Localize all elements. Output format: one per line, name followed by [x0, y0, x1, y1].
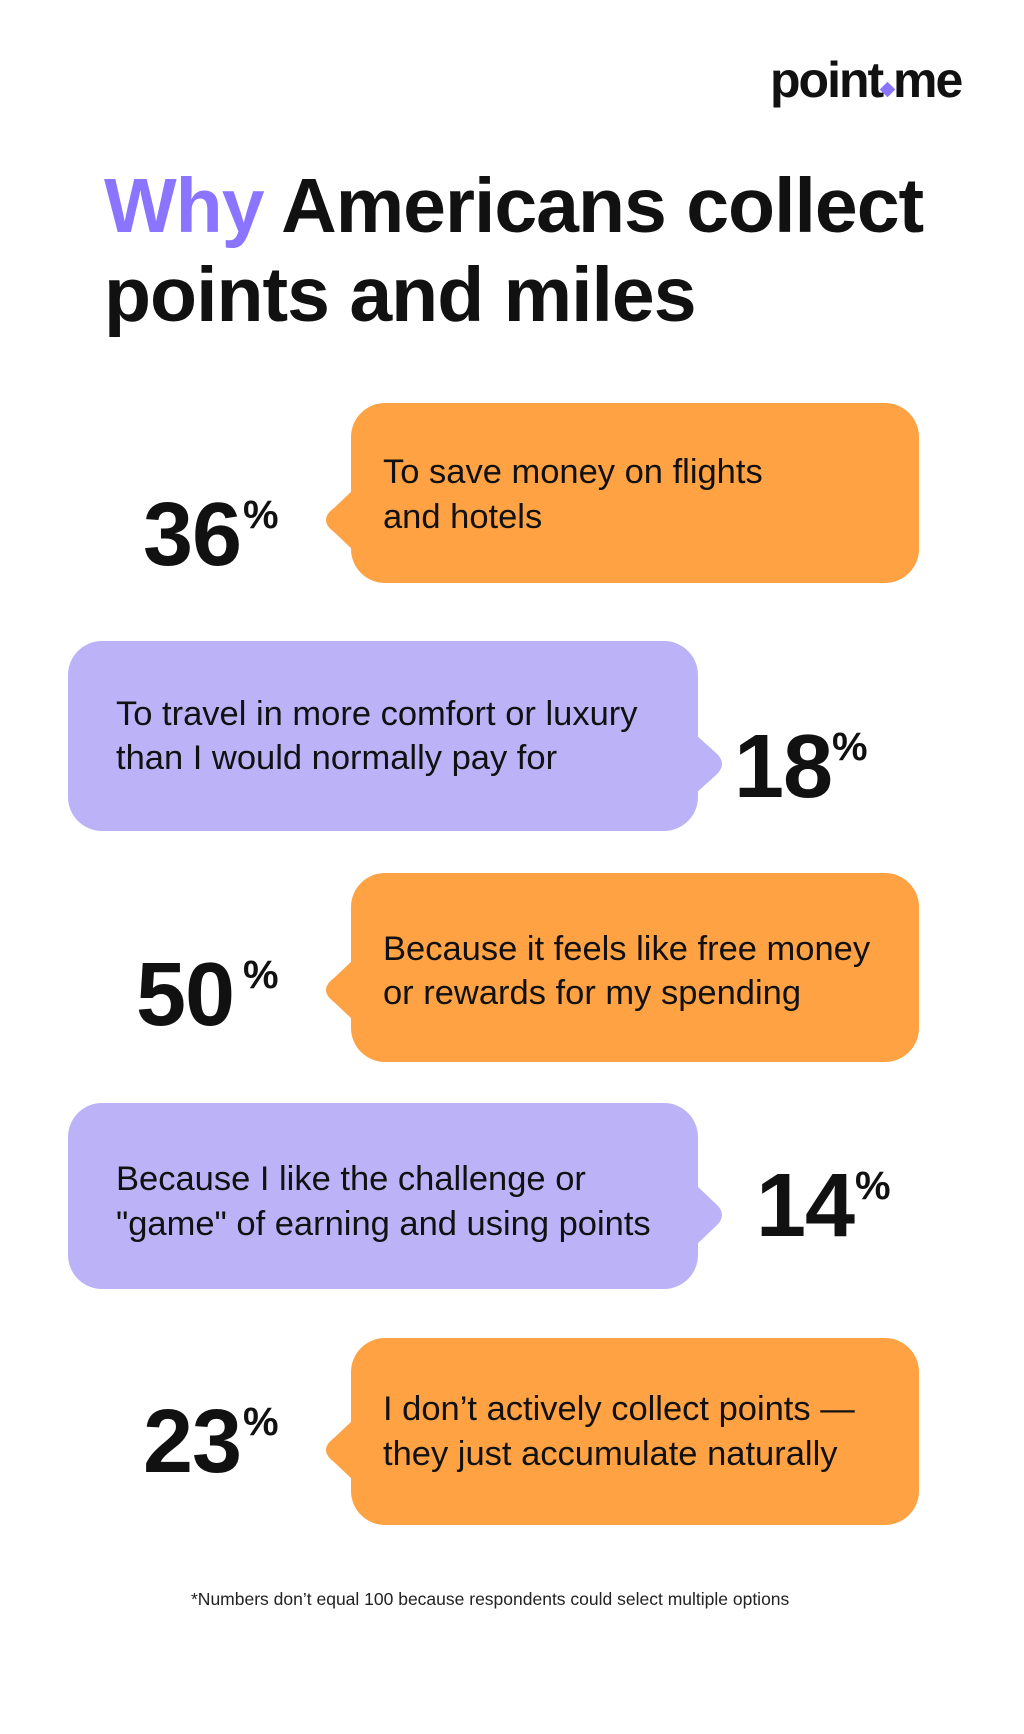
item 1: 36% — [143, 403, 919, 585]
text 5: I don’t actively collect points — — [383, 1390, 855, 1428]
title — [104, 163, 924, 338]
item 2: 18% — [68, 641, 868, 831]
bubble 1 — [326, 403, 919, 583]
text 1: To save money on flights — [383, 453, 763, 491]
logo: me — [893, 52, 962, 108]
footnote: *Numbers don’t equal 100 because respondents could select multiple options — [191, 1589, 790, 1609]
text 2: than I would normally pay for — [116, 739, 557, 777]
stat 50%: % — [243, 953, 279, 997]
logo — [770, 52, 962, 108]
stat 14%: 14 — [756, 1156, 855, 1256]
bubble 4 — [68, 1103, 722, 1289]
title: points and miles — [104, 252, 696, 338]
stat 50% — [136, 945, 279, 1045]
logo: point — [770, 52, 885, 108]
text 4: "game" of earning and using points — [116, 1205, 651, 1243]
text 5: they just accumulate naturally — [383, 1435, 838, 1473]
text 1: and hotels — [383, 498, 542, 536]
stat 18%: % — [832, 725, 868, 769]
text 3: or rewards for my spending — [383, 974, 801, 1012]
item 4: 14% — [68, 1103, 891, 1289]
title: Why Americans collect — [104, 163, 924, 249]
bubble 3 — [326, 873, 919, 1062]
stat 36%: % — [243, 493, 279, 537]
stat 50%: 50 — [136, 945, 234, 1045]
item 5: 23% — [143, 1338, 919, 1525]
stat 23%: % — [243, 1400, 279, 1444]
item 3: 50% — [136, 873, 919, 1062]
text 3: Because it feels like free money — [383, 930, 871, 968]
bubble 5 — [326, 1338, 919, 1525]
stat 36%: 36 — [143, 485, 241, 585]
text 4: Because I like the challenge or — [116, 1160, 586, 1198]
stat 18%: 18 — [734, 717, 832, 817]
stat 23%: 23 — [143, 1392, 241, 1492]
bubble 2 — [68, 641, 722, 831]
stat 14%: % — [855, 1164, 891, 1208]
text 2: To travel in more comfort or luxury — [116, 695, 638, 733]
